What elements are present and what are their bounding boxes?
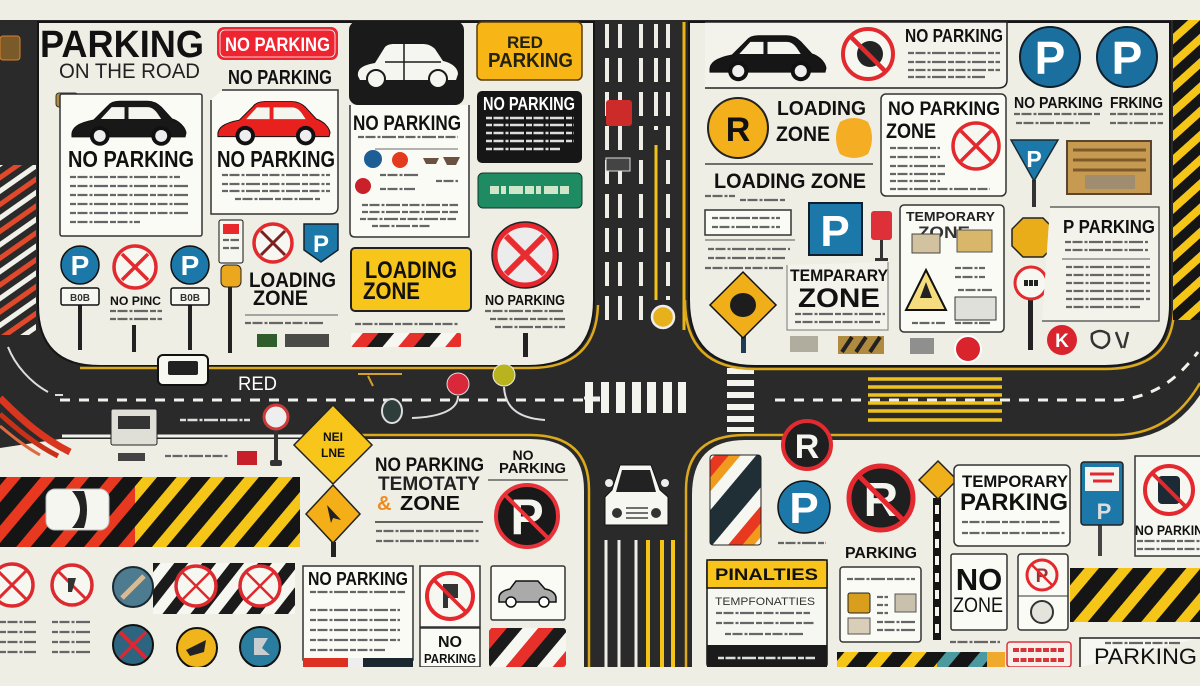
top band (0, 0, 1200, 20)
sign: P circles (1020, 27, 1157, 87)
card: parking right (1042, 207, 1159, 321)
card: no parking lower (303, 566, 413, 667)
sign: red post (264, 405, 288, 466)
icon: small tan badge (56, 93, 78, 107)
card: no parking black car: NO PARKING (68, 146, 194, 172)
card: temporary zone: ZONE (798, 283, 880, 313)
sign: blue round 2 (240, 627, 280, 667)
tag: red temporary (1007, 642, 1071, 667)
text: no parking parking (1014, 95, 1163, 123)
sign: R red: R (795, 428, 819, 466)
sign: yellow diamond nei lne: LNE (321, 446, 345, 460)
sign: P shield: P (313, 231, 329, 258)
title (40, 24, 204, 83)
sign: blue P (778, 481, 830, 543)
road label box (606, 158, 630, 171)
small panel (245, 315, 338, 347)
hazard strip: right side (1173, 20, 1200, 320)
text block: no parking temporary zone: TEMOTATY (378, 474, 480, 495)
card: temporary icons (900, 205, 1004, 332)
sign: red no parking: NO PARKING (225, 35, 330, 56)
stripes behind signs (153, 563, 295, 614)
post (523, 333, 528, 357)
road sign: oval (382, 399, 402, 423)
text block: no parking temporary zone: & (377, 493, 391, 515)
card: no parking small: NO (438, 634, 462, 651)
panel: top right (689, 22, 1170, 366)
sign: yellow diamond (710, 272, 776, 353)
text block: no parking temporary zone (375, 455, 484, 541)
panel: penalties: TEMPFONATTIES (715, 596, 815, 608)
sign: P with post left (61, 246, 99, 350)
stripes box (489, 628, 566, 667)
card: no zone: NO (956, 562, 1002, 597)
sign: yellow diamond nei lne (294, 405, 372, 484)
text: parking: PARKING (845, 545, 917, 562)
panel: top left (38, 22, 594, 366)
sign: P shield (304, 224, 338, 262)
card: temporary parking: TEMPORARY (962, 472, 1069, 491)
vehicle: white car on road (158, 355, 208, 385)
card: no parking small (420, 628, 480, 667)
card: temporary parking: PARKING (960, 489, 1068, 516)
sign: blue with red cross (113, 625, 153, 665)
vehicle: white car front (605, 465, 669, 525)
title: ON THE ROAD (59, 60, 200, 83)
sign: red cross no pinc (110, 246, 162, 352)
card: parking bottom right (1080, 638, 1200, 669)
bottom band (0, 667, 1200, 686)
text: no parking with rule (488, 447, 568, 480)
title: PARKING (40, 24, 204, 66)
sign: brown board (1067, 141, 1151, 194)
sign: cross 1 (0, 564, 33, 606)
card: no parking small: PARKING (424, 651, 476, 666)
card: no parking red car (211, 90, 338, 214)
text line (355, 323, 458, 325)
sketch items: bottom of right panel (790, 331, 1128, 354)
card: temporary zone: TEMPARARY (790, 266, 889, 285)
sign: red cross large (492, 222, 558, 288)
road mark: orange (358, 374, 402, 386)
sign: red parking yellow (477, 22, 582, 80)
text columns (0, 622, 92, 652)
sign: blue with red header (1081, 462, 1123, 556)
card: no parking zone: ZONE (886, 120, 936, 143)
card: no P small: P (1036, 566, 1049, 587)
sign: yellow octagon (1012, 218, 1054, 257)
badge: yellow (836, 118, 872, 158)
text block: no parking (485, 292, 565, 327)
card: no parking right (1135, 456, 1200, 556)
panel: bottom right (692, 395, 1200, 667)
sign: cross 3 (176, 566, 216, 606)
sign: red parking yellow: PARKING (488, 50, 573, 72)
sign: white car on black (349, 21, 464, 105)
road sign: green yellow (493, 364, 545, 420)
hazard strip: left (0, 477, 300, 547)
sign: blue triangle P (1011, 140, 1058, 207)
panel: bottom left (0, 439, 584, 667)
vehicle: truck (111, 409, 157, 445)
sign: no P (496, 485, 558, 547)
card: parking right: P PARKING (1063, 217, 1155, 237)
text: no parking with rule: NO (512, 447, 534, 463)
card: newspaper (840, 567, 921, 642)
stripe strip (351, 333, 461, 347)
sign: no parking black: NO PARKING (483, 94, 575, 114)
sign: P circles: P (1035, 32, 1065, 84)
sign: P with post right: B0B (180, 293, 200, 304)
card: no zone: ZONE (953, 594, 1003, 617)
card: no P (420, 566, 480, 627)
heading: loading zone: LOADING ZONE (714, 170, 866, 193)
text: loading zone: ZONE (776, 123, 830, 146)
sign: P circles: P (1112, 32, 1142, 84)
card: car and no parking top right: NO PARKING (905, 26, 1003, 46)
sign: small red and yellow post (219, 220, 243, 353)
road edge: top left (80, 305, 598, 368)
card: car and no parking top right (705, 22, 1007, 88)
small caption (950, 641, 1000, 643)
sign: yellow diamond tall post (919, 461, 957, 640)
sign: blue round (113, 567, 153, 607)
text block: no parking: NO PARKING (485, 292, 565, 309)
sign: P with post right (171, 246, 209, 350)
sign: red parking yellow: RED (507, 33, 543, 52)
sign: yellow diamond arrow (306, 485, 360, 557)
sign: yellow round (177, 628, 217, 668)
text: loading zone (249, 269, 336, 310)
road sign: red (412, 373, 469, 418)
sign: red K (1047, 325, 1077, 355)
card: no P small (1018, 554, 1068, 630)
card: no parking lower: NO PARKING (308, 569, 408, 589)
panel: penalties: PINALTIES (715, 565, 818, 584)
sign: blue with red header: P (1097, 499, 1111, 524)
road edge: top right (685, 300, 1174, 369)
sign: red small (955, 336, 981, 362)
text: loading zone (776, 98, 866, 146)
sign: red K: K (1055, 331, 1069, 352)
sign: no P: P (510, 489, 544, 545)
card: no parking with icons (350, 105, 469, 237)
stripes box: mix (710, 455, 761, 545)
hazard strip: right (1070, 568, 1200, 622)
sign: blue P: P (789, 484, 819, 533)
sign: green (478, 173, 582, 208)
icon: left edge badge (0, 36, 20, 60)
road sign: red square road (606, 100, 632, 126)
sign: yellow diamond nei lne: NEI (323, 430, 343, 444)
text: no parking parking: FRKING (1110, 95, 1163, 112)
road text (180, 419, 250, 421)
card: temporary zone (787, 262, 889, 330)
sign: loading R: R (726, 111, 750, 149)
sign: cross 2 (52, 565, 92, 605)
card: temporary parking (954, 465, 1070, 546)
sign: no R large: R (864, 474, 898, 527)
road edge: bottom right (686, 383, 1200, 667)
sign: red no parking (217, 27, 338, 60)
text block: no parking temporary zone: NO PARKING (375, 455, 484, 476)
sign: no R large (849, 466, 913, 530)
text: loading zone: LOADING (777, 98, 866, 120)
text: no parking with rule: PARKING (499, 460, 566, 477)
text: loading zone: ZONE (253, 287, 308, 310)
sign: blue triangle P: P (1026, 146, 1042, 172)
card: car (491, 566, 565, 620)
road sign: yellow disc (652, 306, 674, 328)
card: no parking zone: NO PARKING (888, 99, 1000, 120)
text: no parking parking: NO PARKING (1014, 95, 1103, 112)
sign: blue P square: P (820, 207, 850, 256)
sign: loading zone yellow: ZONE (363, 278, 420, 305)
sign: R red (783, 421, 831, 469)
sign: loading R (708, 98, 768, 158)
small captions (118, 451, 257, 465)
text block: left middle (705, 196, 795, 268)
card: no zone (951, 554, 1007, 630)
card: temporary icons: ZONE (918, 223, 970, 242)
text block: no parking temporary zone: ZONE (400, 493, 460, 515)
card: no parking red car: NO PARKING (217, 146, 335, 172)
sign: small red post (871, 211, 892, 261)
road edge: bottom left (0, 398, 589, 667)
panel: penalties (707, 560, 827, 667)
sign: red circle post (1015, 267, 1047, 350)
sign: no parking black (477, 91, 582, 163)
card: no parking with icons: NO PARKING (353, 112, 461, 135)
card: parking bottom right: PARKING (1094, 644, 1197, 669)
sign: cross 4 (240, 566, 280, 606)
card: temporary icons: TEMPORARY (906, 209, 995, 224)
sign: cross (254, 224, 292, 262)
strip: bottom stripes (837, 652, 1005, 667)
sign: loading zone yellow: LOADING (365, 257, 457, 284)
text: loading zone: LOADING (249, 269, 336, 292)
card: no parking black car (60, 94, 202, 236)
road label: red: RED (238, 374, 277, 395)
sign: P with post left: B0B (70, 293, 90, 304)
card: no parking zone (881, 94, 1006, 196)
sign: blue P square (809, 203, 862, 256)
heading: no parking: NO PARKING (228, 67, 332, 89)
sign: P with post left: P (71, 250, 89, 281)
sign: red cross no pinc: NO PINC (110, 294, 161, 308)
sign: P with post right: P (181, 250, 199, 281)
sign: loading zone yellow (351, 248, 471, 311)
